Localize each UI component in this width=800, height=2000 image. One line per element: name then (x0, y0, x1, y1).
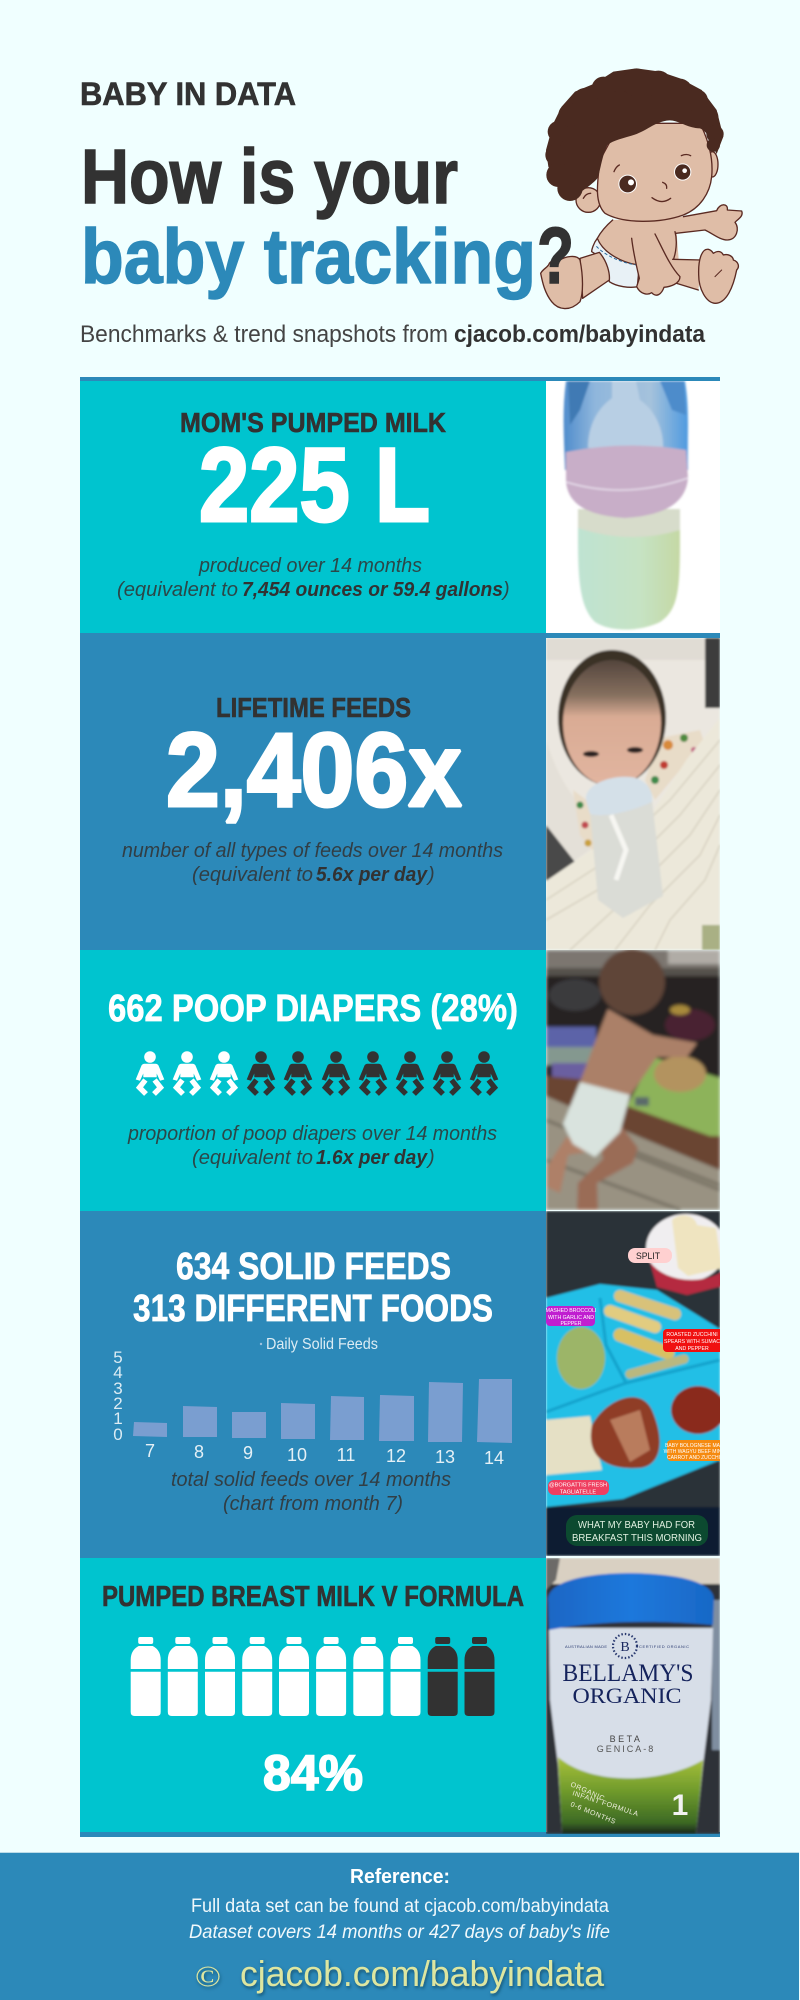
panel: pumped breast milk v formula: PUMPED BREAST MILK V FORMULA (102, 1581, 524, 1613)
panel: mom's pumped milk: (equivalent to (117, 579, 238, 601)
panel: solid feeds (80, 1211, 546, 1558)
header eyebrow: BABY IN DATA: BABY IN DATA (80, 76, 296, 112)
tag labels on photo: MASHED BROCCOLI (546, 1308, 596, 1314)
footer panel (0, 1852, 799, 2000)
panel: poop diapers: (equivalent to (192, 1147, 313, 1169)
tin label text: BETA (610, 1734, 642, 1744)
icon: cartoon baby (541, 68, 742, 309)
panel: solid feeds: 634 SOLID FEEDS (176, 1246, 451, 1288)
bar chart: daily solid feeds: 12 (386, 1446, 406, 1466)
bar chart: daily solid feeds (113, 1336, 512, 1468)
bar chart: daily solid feeds: 11 (337, 1445, 355, 1465)
title line 2: baby tracking (81, 214, 536, 300)
subtitle: cjacob.com/babyindata (454, 321, 706, 348)
panel: lifetime feeds: (equivalent to (192, 864, 313, 886)
pictogram: 3 of 10 diapers (136, 1051, 498, 1094)
tin label text (562, 1634, 694, 1826)
panel: solid feeds: (chart from month 7) (223, 1493, 403, 1515)
panel: mom's pumped milk (80, 381, 546, 633)
question mark over the baby's foot: ? (537, 211, 574, 300)
bar chart: daily solid feeds: 14 (484, 1448, 504, 1468)
photo: milk bottle (546, 381, 720, 633)
top rule (80, 377, 720, 381)
tag labels on photo: AND PEPPER (675, 1346, 709, 1352)
tin label text: CERTIFIED ORGANIC (639, 1644, 689, 1649)
tag labels on photo: WHAT MY BABY HAD FOR (578, 1519, 695, 1531)
panel: poop diapers: ) (426, 1147, 435, 1169)
bar chart: daily solid feeds: 4 (113, 1363, 123, 1382)
panel: lifetime feeds: 5.6x per day (316, 864, 428, 886)
panel: mom's pumped milk: 7,454 ounces or 59.4 gallons (242, 579, 503, 601)
tag labels on photo: PEPPER (560, 1321, 582, 1327)
panel: lifetime feeds: LIFETIME FEEDS (216, 692, 411, 723)
tag labels on photo: ROASTED ZUCCHINI (666, 1332, 718, 1338)
panel: mom's pumped milk: MOM'S PUMPED MILK (180, 407, 446, 438)
panel: poop diapers: 662 POOP DIAPERS (28%) (108, 988, 518, 1030)
bar chart: daily solid feeds: 1 (113, 1409, 123, 1428)
tag labels on photo: SPEARS WITH SUMAC (664, 1339, 720, 1345)
tag labels on photo: WITH WAGYU BEEF MINCE (664, 1449, 729, 1455)
tin label text: BELLAMY'S (562, 1660, 694, 1687)
tin label text: ORGANIC (572, 1683, 682, 1708)
bar chart: daily solid feeds: 2 (113, 1394, 123, 1413)
bar chart: daily solid feeds: 8 (194, 1442, 204, 1462)
tag labels on photo: TAGLIATELLE (560, 1490, 596, 1496)
footer brand link with copyright: © (195, 1960, 221, 1993)
pictogram: bottles 8 of 10 (131, 1637, 494, 1716)
bar chart: daily solid feeds: 3 (113, 1379, 123, 1398)
bar chart: daily solid feeds: 7 (145, 1441, 155, 1461)
title line 1: How is your (81, 134, 458, 220)
panel: lifetime feeds: 2,406x (166, 712, 462, 829)
photo: baby in diaper crawling (546, 949, 720, 1210)
bar chart: daily solid feeds: 13 (435, 1447, 455, 1467)
subtitle: Benchmarks & trend snapshots from (80, 321, 448, 348)
bar chart: daily solid feeds: 5 (113, 1348, 123, 1367)
tin label text: ORGANIC (569, 1781, 606, 1803)
panel: mom's pumped milk: 225 L (199, 427, 430, 544)
bar chart: daily solid feeds: 10 (287, 1445, 307, 1465)
footer brand link with copyright: cjacob.com/babyindata (240, 1953, 605, 1994)
tin label text: INFANT FORMULA (571, 1790, 639, 1818)
tag labels on photo: @BORGATTIS FRESH (549, 1482, 607, 1488)
panel: lifetime feeds: ) (426, 864, 435, 886)
photo: Bellamy's Organic formula tin (546, 1558, 720, 1834)
panel: poop diapers: 1.6x per day (316, 1147, 428, 1169)
panel: solid feeds: total solid feeds over 14 months (171, 1469, 451, 1491)
panel: pumped breast milk v formula (80, 1558, 720, 1837)
bar chart: daily solid feeds: 9 (243, 1443, 253, 1463)
tin label text: AUSTRALIAN MADE (565, 1644, 607, 1649)
tag labels on photo: CARROT AND ZUCCHINI (667, 1455, 725, 1461)
panel: poop diapers: proportion of poop diapers over 14 months (127, 1123, 497, 1145)
footer panel: Full data set can be found at cjacob.com/babyindata (191, 1896, 609, 1917)
photo: baby drinking from bottle (546, 638, 720, 950)
footer panel: Reference: (350, 1866, 450, 1888)
panel: mom's pumped milk: produced over 14 months (198, 555, 422, 577)
panel: pumped breast milk v formula: 84% (263, 1745, 363, 1801)
panel: solid feeds: 313 DIFFERENT FOODS (133, 1288, 493, 1330)
tin label text: 1 (672, 1789, 688, 1822)
tin label text: B (620, 1640, 630, 1655)
panel: poop diapers (80, 950, 546, 1211)
tag labels on photo: BREAKFAST THIS MORNING (572, 1532, 702, 1544)
bar chart: daily solid feeds: 0 (113, 1425, 123, 1444)
tag labels on photo: BABY BOLOGNESE MADE (665, 1443, 728, 1449)
subtitle (80, 321, 706, 348)
tag labels on photo: SPLIT (636, 1251, 660, 1261)
tag labels on photo (546, 1248, 729, 1546)
photo: baby breakfast plate (546, 1211, 729, 1556)
bar chart: daily solid feeds: Daily Solid Feeds (266, 1336, 378, 1353)
footer panel: Dataset covers 14 months or 427 days of baby's life (189, 1922, 610, 1943)
tin label text: 0-6 MONTHS (569, 1801, 617, 1826)
panel: lifetime feeds: number of all types of feeds over 14 months (122, 840, 503, 862)
panel: mom's pumped milk: ) (501, 579, 510, 601)
tag labels on photo: WITH GARLIC AND (548, 1315, 594, 1321)
panel: lifetime feeds (80, 633, 720, 950)
tin label text: GENICA-8 (597, 1744, 655, 1754)
